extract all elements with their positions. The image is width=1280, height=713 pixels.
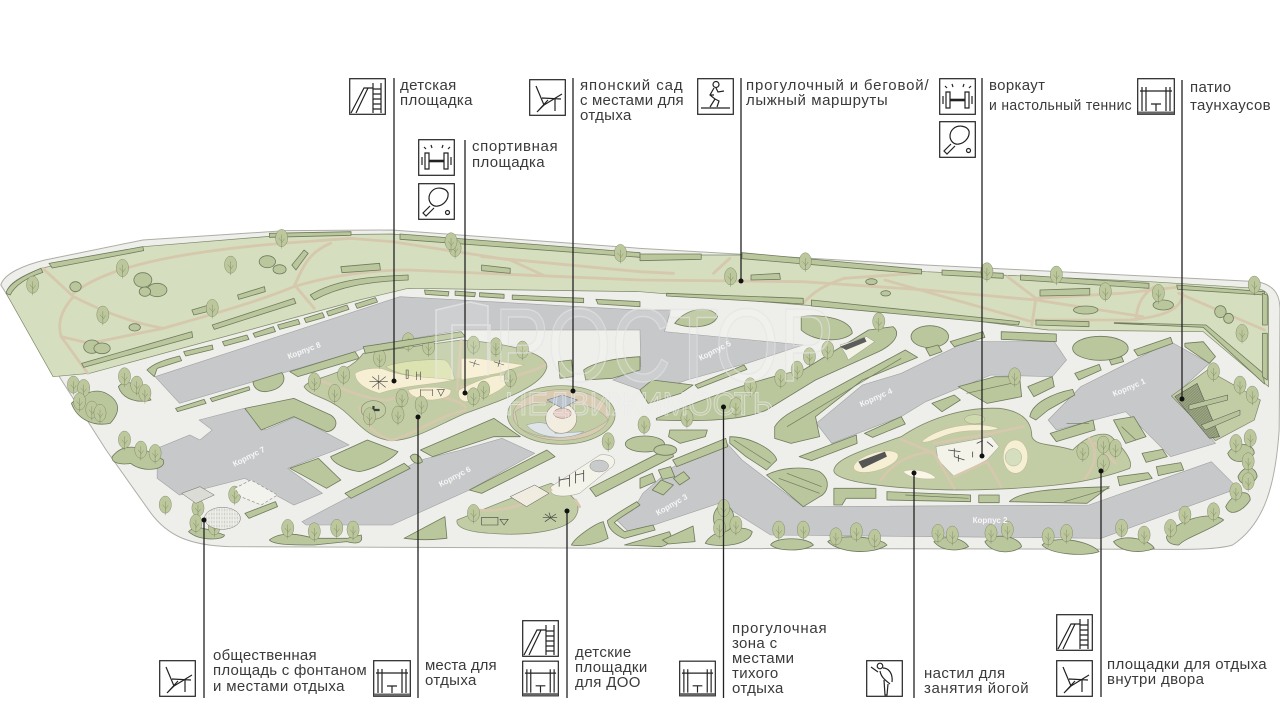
building: korpus 1 xyxy=(1048,342,1216,457)
left tree clumps xyxy=(67,368,362,545)
park strip xyxy=(6,229,1269,387)
lawn xyxy=(386,360,455,380)
callout: public square with fountain: общественная xyxy=(213,647,317,664)
site plan map xyxy=(1,229,1280,554)
callout: townhouse patio xyxy=(1138,79,1271,401)
callout: public square with fountain: площадь с фонтаном xyxy=(213,662,367,679)
watermark xyxy=(436,288,834,422)
callout: yoga deck xyxy=(867,470,1029,698)
callout: quiet walking zone: отдыха xyxy=(732,680,784,697)
label korpus 2: Корпус 2 xyxy=(973,516,1008,525)
callout: children's playground: детская xyxy=(400,77,457,94)
building name labels xyxy=(231,339,1147,525)
callout: preschool playgrounds: для ДОО xyxy=(575,674,641,691)
callout: japanese garden: с местами для xyxy=(580,92,684,109)
sand play areas xyxy=(355,368,453,393)
green beds left xyxy=(147,298,690,547)
label korpus 1: Корпус 1 xyxy=(1111,377,1147,399)
callout: sports ground xyxy=(419,138,558,396)
callout: walking, running and ski routes: лыжный маршруты xyxy=(746,92,888,109)
plaza fountain xyxy=(204,507,240,529)
label korpus 4: Корпус 4 xyxy=(858,386,894,409)
watermark logo xyxy=(436,302,490,380)
callout: sports ground: спортивная xyxy=(472,138,558,155)
label korpus 6: Корпус 6 xyxy=(437,464,473,489)
callout: townhouse patio: таунхаусов xyxy=(1190,97,1271,114)
building: korpus 3 and 2 xyxy=(617,443,1238,538)
watermark name: РОСТОР xyxy=(494,288,834,404)
hedge detail lines xyxy=(734,358,1136,502)
callout: workout and table tennis: воркаут xyxy=(989,77,1045,94)
plaza paving xyxy=(235,480,278,505)
callout: yoga deck: занятия йогой xyxy=(924,680,1029,697)
buildings xyxy=(155,297,1238,538)
play equipment xyxy=(369,360,504,396)
callout: courtyard recreation areas xyxy=(1057,468,1267,697)
callout: townhouse patio: патио xyxy=(1190,79,1231,96)
callout: japanese garden xyxy=(530,77,684,394)
callout: public square with fountain xyxy=(160,518,367,698)
right courtyard garden xyxy=(834,368,1131,490)
park hedges xyxy=(6,232,1267,384)
garden path xyxy=(318,340,545,440)
callout: walking, running and ski routes: прогулочный и беговой/ xyxy=(746,77,929,94)
label korpus 7: Корпус 7 xyxy=(231,445,267,469)
watermark subtitle: НЕДВИЖИМОСТЬ xyxy=(505,386,773,422)
callout: workout and table tennis xyxy=(940,77,1132,458)
callout: preschool playgrounds: площадки xyxy=(575,659,648,676)
building 5 court details xyxy=(840,337,875,360)
callout: yoga deck: настил для xyxy=(924,665,1005,682)
building: korpus 6 xyxy=(302,438,535,525)
green beds right xyxy=(625,309,1260,554)
callout: preschool playgrounds: детские xyxy=(575,644,632,661)
callout: courtyard recreation areas: площадки для отдыха xyxy=(1107,656,1267,673)
south garden for preschool xyxy=(457,433,615,534)
label korpus 5: Корпус 5 xyxy=(697,339,733,363)
central garden xyxy=(304,332,547,441)
callout: preschool playgrounds xyxy=(523,508,648,698)
patio of townhouses xyxy=(1171,370,1260,441)
callout: japanese garden: японский сад xyxy=(580,77,683,94)
callout: quiet walking zone: прогулочная xyxy=(732,620,827,637)
callout: public square with fountain: и местами отдыха xyxy=(213,678,345,695)
site ground and roads xyxy=(1,230,1280,549)
callout: sports ground: площадка xyxy=(472,154,545,171)
trees right xyxy=(638,313,1258,549)
japanese garden xyxy=(507,386,615,444)
hedge around korpus 3 end xyxy=(607,502,655,538)
callout: seating xyxy=(374,414,497,698)
label korpus 3: Корпус 3 xyxy=(654,492,690,517)
park trees xyxy=(27,229,1260,344)
callout: children's playground: площадка xyxy=(400,92,473,109)
building: korpus 8 and 5 xyxy=(155,297,803,403)
building: korpus 4 xyxy=(816,342,1067,443)
label korpus 8: Корпус 8 xyxy=(286,340,323,361)
callout: workout and table tennis: и настольный теннис xyxy=(989,97,1132,114)
callout: quiet walking zone: местами xyxy=(732,650,794,667)
callout: japanese garden: отдыха xyxy=(580,107,632,124)
callout: children's playground xyxy=(350,77,473,384)
callout: seating: места для xyxy=(425,657,497,674)
callout: walking, running and ski routes xyxy=(698,77,929,284)
callout: quiet walking zone: тихого xyxy=(732,665,779,682)
building: korpus 7 xyxy=(157,408,349,505)
callout: courtyard recreation areas: внутри двора xyxy=(1107,671,1205,688)
callout: quiet walking zone xyxy=(680,404,827,698)
callout: quiet walking zone: зона с xyxy=(732,635,778,652)
callout: seating: отдыха xyxy=(425,672,477,689)
park paths xyxy=(43,238,1264,373)
